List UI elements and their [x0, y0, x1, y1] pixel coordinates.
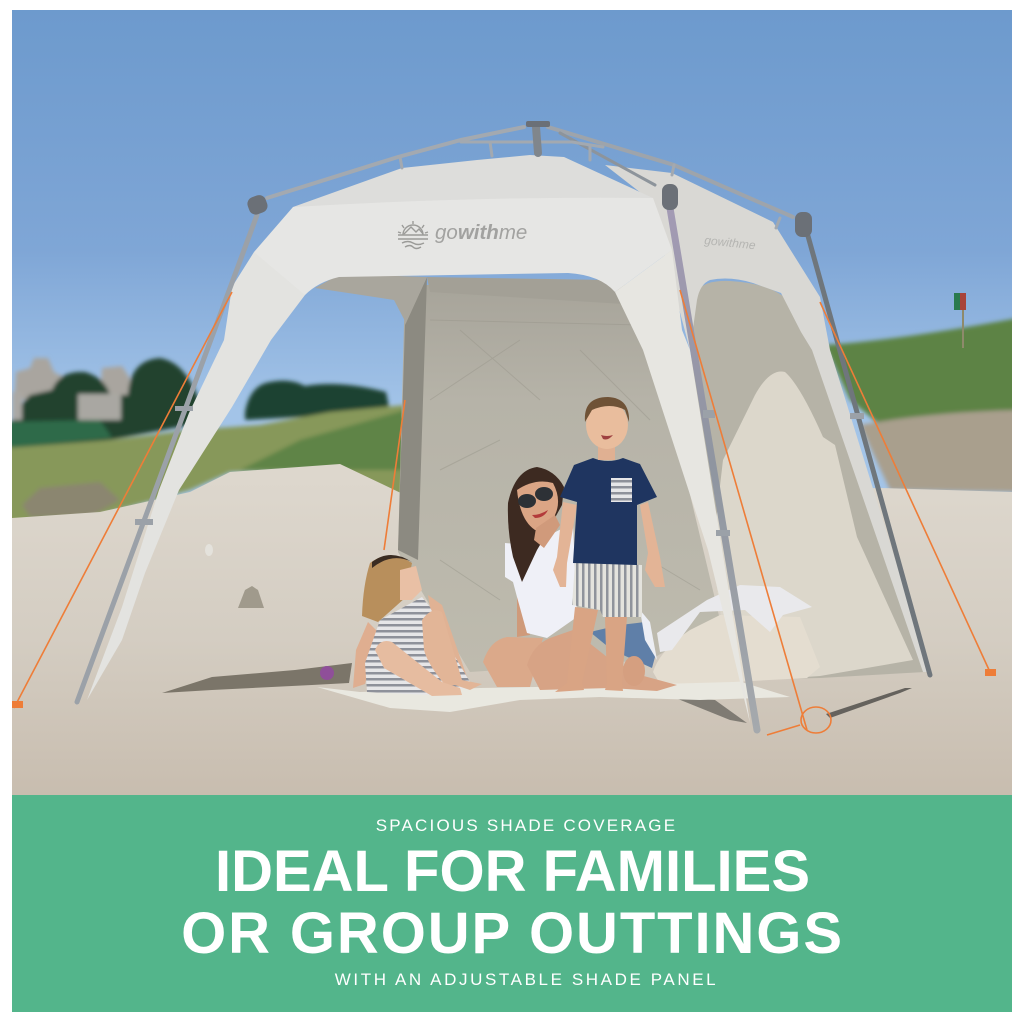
logo sun icon	[398, 221, 428, 248]
logo on tent	[398, 221, 527, 248]
distant bird	[205, 544, 213, 556]
back wall	[398, 285, 720, 672]
tent front leg panel	[615, 250, 750, 723]
boy shirt	[560, 458, 657, 565]
girl dress	[365, 597, 473, 695]
boy smile	[601, 435, 613, 440]
guy line stakes	[12, 669, 996, 708]
tent right side canopy	[605, 165, 930, 672]
shirt pocket	[611, 478, 632, 502]
boy legs	[555, 607, 598, 692]
boy	[553, 397, 665, 692]
mother left leg	[483, 637, 543, 687]
house	[78, 394, 121, 420]
dune base shadow	[22, 482, 120, 517]
mother shirt tail	[641, 612, 657, 660]
mother	[483, 467, 677, 691]
tent roof panel	[290, 155, 660, 220]
right side wall	[690, 281, 925, 680]
beach seagull	[238, 586, 264, 608]
girl face	[400, 566, 422, 600]
left dune grass	[6, 405, 405, 525]
left dark green band	[6, 420, 112, 448]
girl legs	[422, 610, 482, 690]
headline: OR GROUP OUTTINGS	[181, 901, 844, 966]
ground strap	[826, 688, 912, 718]
bag and towels	[653, 585, 820, 684]
green banner	[12, 795, 1012, 1012]
boy neck	[598, 442, 615, 460]
boy head	[586, 401, 628, 449]
right hill grass	[825, 318, 1018, 425]
girl far arm	[428, 595, 468, 682]
sunglasses	[518, 494, 536, 508]
boy shorts	[572, 563, 642, 617]
beach photo scene	[12, 10, 1012, 795]
side logo: gowithme	[704, 233, 757, 252]
left trees	[12, 358, 199, 450]
mother right leg	[527, 630, 677, 691]
girl	[353, 555, 482, 696]
sand	[12, 464, 1012, 795]
right dune sand	[860, 410, 1018, 492]
lips	[532, 510, 548, 518]
sky	[12, 10, 1012, 510]
left houses	[14, 358, 130, 400]
mother jeans	[590, 622, 655, 668]
mother back arm	[517, 597, 530, 637]
distant tree line	[245, 381, 390, 420]
white towel	[317, 680, 790, 712]
guy lines	[14, 290, 990, 735]
eyebrow text: SPACIOUS SHADE COVERAGE	[376, 816, 677, 835]
frame joints	[245, 121, 812, 237]
mother hand	[623, 656, 645, 686]
purple ball	[320, 666, 334, 680]
tent left leg panel	[87, 252, 305, 700]
ground shadow right	[678, 699, 747, 723]
tent front valance	[254, 198, 672, 295]
girl near arm	[353, 622, 378, 688]
blurred background landscape	[6, 318, 1018, 525]
headline: IDEAL FOR FAMILIES	[215, 839, 810, 904]
ground shadow left	[162, 663, 352, 693]
logo on tent: gowithme	[435, 221, 527, 244]
girl hair	[362, 556, 412, 622]
flag	[954, 293, 966, 348]
pole brackets	[135, 406, 864, 536]
mother shirt	[505, 523, 577, 638]
headline	[181, 839, 844, 966]
boy hair	[585, 397, 629, 422]
boy arms	[553, 502, 577, 587]
tent frame	[77, 127, 930, 730]
sunlit patch on wall	[712, 371, 913, 680]
ceiling	[315, 274, 427, 323]
mother face	[517, 482, 558, 530]
mother hair	[508, 467, 564, 582]
subtext: WITH AN ADJUSTABLE SHADE PANEL	[335, 970, 718, 989]
tent pillar seam	[398, 277, 427, 560]
